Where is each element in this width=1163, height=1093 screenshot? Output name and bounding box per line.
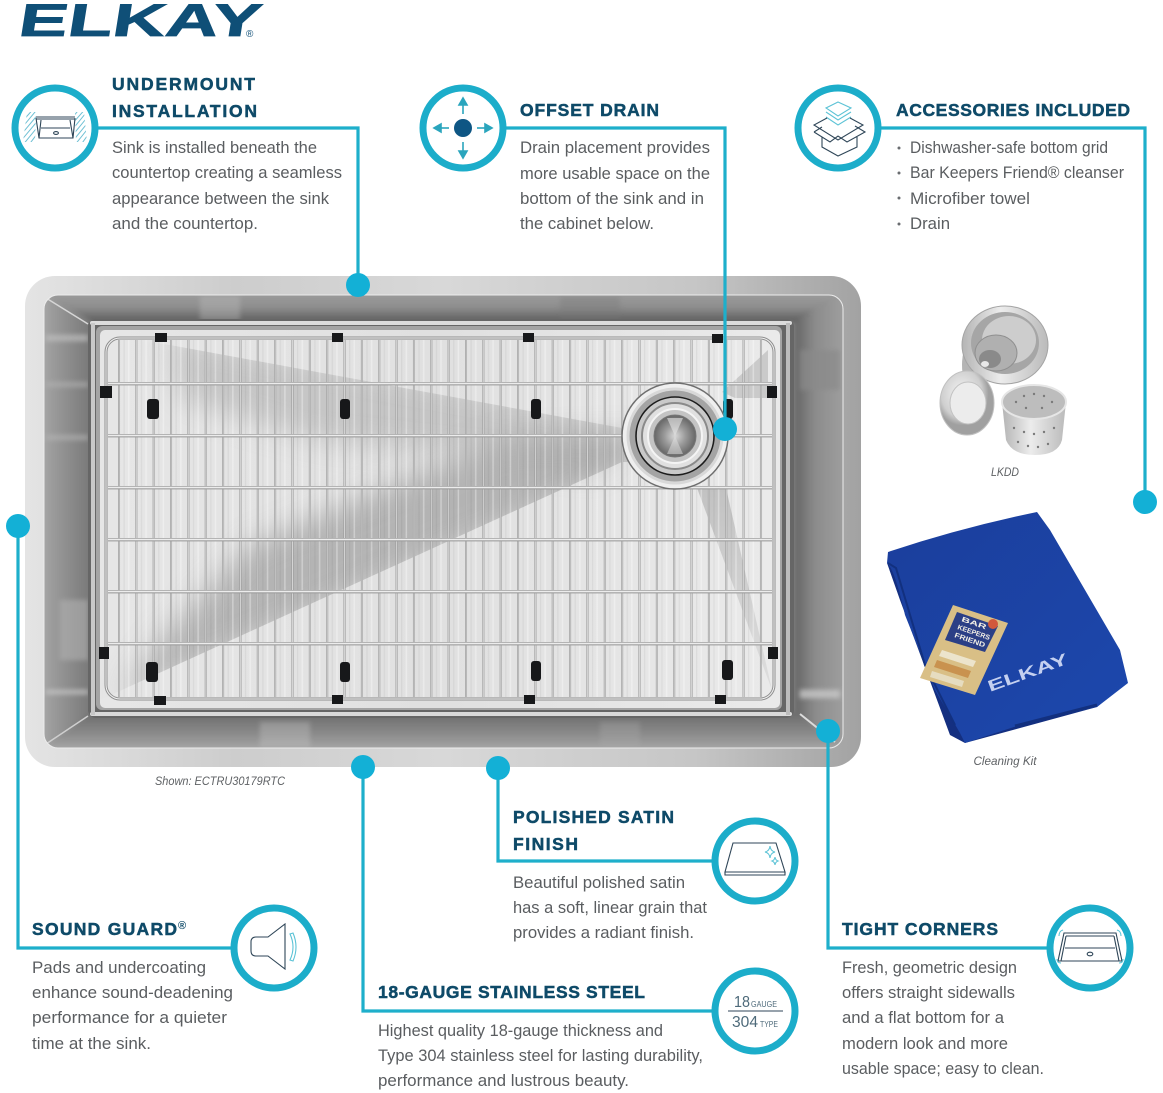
panel: tight corners: offers straight sidewalls (842, 983, 1015, 1002)
grid clips and bumpers (99, 333, 778, 705)
panel: 18-gauge stainless steel: 18-GAUGE STAINLESS STEEL (378, 982, 645, 1002)
panel: 18-gauge stainless steel: performance and lustrous beauty. (378, 1071, 629, 1090)
sink photo (25, 276, 861, 767)
panel: polished satin finish (486, 756, 795, 942)
panel: offset drain: Drain placement provides (520, 138, 710, 157)
caption: shown model: Shown: ECTRU30179RTC (155, 774, 285, 788)
icon: speaker (234, 908, 314, 988)
panel: polished satin finish: Beautiful polished satin (513, 873, 685, 892)
panel: sound guard: SOUND GUARD (32, 919, 177, 939)
panel: undermount installation: Sink is installed beneath the (112, 138, 317, 157)
panel: tight corners: Fresh, geometric design (842, 958, 1017, 977)
panel: 18-gauge stainless steel (351, 755, 795, 1090)
Bar Keepers Friend packet: BAR (960, 616, 987, 631)
panel: undermount installation: appearance between the sink (112, 189, 329, 208)
panel: 18-gauge stainless steel: Highest quality 18-gauge thickness and (378, 1021, 663, 1040)
panel: offset drain (423, 88, 737, 441)
panel: offset drain: OFFSET DRAIN (520, 100, 659, 120)
panel: polished satin finish: FINISH (513, 834, 578, 854)
logo: Elkay (15, 0, 266, 46)
photo: cleaning kit towel (887, 512, 1128, 743)
caption: cleaning kit: Cleaning Kit (974, 754, 1037, 768)
icon: stacked box (798, 88, 878, 168)
accessories list: Microfiber towel (910, 189, 1030, 208)
panel: tight corners: usable space; easy to clean. (842, 1059, 1044, 1078)
panel: undermount installation (15, 74, 370, 297)
panel: polished satin finish: has a soft, linear grain that (513, 898, 707, 917)
panel: sound guard: ® (178, 920, 186, 932)
Bar Keepers Friend packet (920, 605, 1008, 695)
panel: sound guard: enhance sound-deadening (32, 983, 233, 1002)
panel: sound guard (6, 514, 314, 1053)
panel: undermount installation: INSTALLATION (112, 101, 257, 121)
icon: offset drain arrows (423, 88, 503, 168)
panel: undermount installation: and the countertop. (112, 214, 258, 233)
panel: sound guard: time at the sink. (32, 1034, 151, 1053)
panel: sound guard: performance for a quieter (32, 1008, 227, 1027)
panel: accessories included: ACCESSORIES INCLUDED (896, 100, 1130, 120)
icon: gauge and type: TYPE (760, 1020, 778, 1029)
caption: LKDD: LKDD (991, 465, 1019, 479)
panel: 18-gauge stainless steel: Type 304 stainless steel for lasting durability, (378, 1046, 703, 1065)
panel: tight corners (816, 719, 1130, 1078)
Bar Keepers Friend packet: KEEPERS (956, 624, 991, 642)
sink drain (622, 383, 728, 489)
panel: undermount installation: UNDERMOUNT (112, 74, 255, 94)
photo: LKDD drain assembly (940, 306, 1066, 455)
icon: undermount sink (15, 88, 95, 168)
icon: polished surface (715, 821, 795, 901)
panel: sound guard: Pads and undercoating (32, 958, 206, 977)
icon: tight corner sink (1050, 908, 1130, 988)
accessories list: Drain (910, 214, 950, 233)
panel: accessories included (798, 88, 1157, 514)
bottom grid (106, 338, 774, 699)
logo: Elkay: ® (246, 29, 254, 40)
icon: gauge and type: GAUGE (751, 1000, 777, 1009)
panel: tight corners: modern look and more (842, 1034, 1008, 1053)
accessories list: Bar Keepers Friend® cleanser (910, 163, 1124, 182)
accessories list (898, 138, 1124, 233)
panel: offset drain: bottom of the sink and in (520, 189, 704, 208)
icon: gauge and type: 18 (734, 994, 750, 1011)
icon: gauge and type: 304 (732, 1014, 758, 1031)
towel logo: ELKAY (986, 651, 1071, 696)
panel: polished satin finish: POLISHED SATIN (513, 807, 674, 827)
panel: polished satin finish: provides a radiant finish. (513, 923, 694, 942)
panel: tight corners: TIGHT CORNERS (842, 919, 998, 939)
panel: offset drain: more usable space on the (520, 164, 710, 183)
accessories list: Dishwasher-safe bottom grid (910, 138, 1108, 157)
panel: undermount installation: countertop creating a seamless (112, 163, 342, 182)
icon: gauge and type (715, 971, 795, 1051)
floor reflections (120, 335, 772, 700)
Bar Keepers Friend packet: FRIEND (953, 632, 986, 649)
panel: tight corners: and a flat bottom for a (842, 1008, 1005, 1027)
panel: offset drain: the cabinet below. (520, 214, 654, 233)
